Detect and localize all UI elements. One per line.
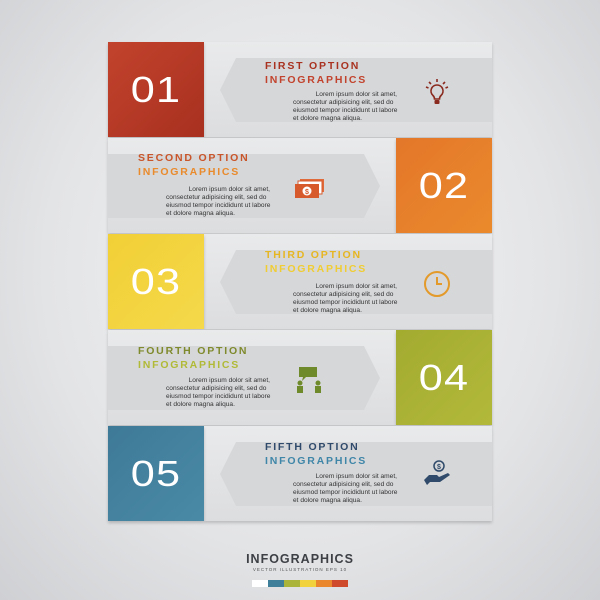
number square 05 [108,426,204,521]
text 3: consectetur adipisicing elit, sed do eiusmod tempor incididunt ut labore et dolore magna aliqua. [293,291,397,314]
text 4: Lorem ipsum dolor sit amet, [189,377,270,384]
title 4: FOURTH OPTION [138,345,248,357]
text 2: Lorem ipsum dolor sit amet, [189,186,270,193]
icon: money [295,179,324,198]
number square 02 [396,138,492,233]
row 3: third option [106,234,494,332]
text 5: Lorem ipsum dolor sit amet, [316,473,397,480]
title 2: INFOGRAPHICS [138,166,240,178]
title 4 [138,345,248,371]
title 3: INFOGRAPHICS [265,263,367,275]
footer title: INFOGRAPHICS [246,552,354,566]
arrow band 1 [220,58,492,122]
number square 04: 04 [419,356,469,398]
row 2: second option [106,138,494,236]
title 3: THIRD OPTION [265,249,362,261]
title 4: INFOGRAPHICS [138,359,240,371]
text 2: consectetur adipisicing elit, sed do eiusmod tempor incididunt ut labore et dolore magna aliqua. [166,194,270,217]
row 4: fourth option [106,330,494,428]
text 5: consectetur adipisicing elit, sed do eiusmod tempor incididunt ut labore et dolore magna aliqua. [293,481,397,504]
arrow band 3 [220,250,492,314]
title 1: FIRST OPTION [265,60,360,72]
icon: light bulb [426,79,448,104]
title 2: SECOND OPTION [138,152,250,164]
title 2 [138,152,250,178]
row 1: first option [106,42,494,140]
color legend bar [252,580,348,587]
text 1: Lorem ipsum dolor sit amet, [316,91,397,98]
number square 02: 02 [419,164,469,206]
icon: money: $ [305,189,309,196]
icon: chat people [297,367,321,393]
title 3 [265,249,367,275]
arrow band 2 [108,154,380,218]
number square 03 [108,234,204,329]
arrow band 4 [108,346,380,410]
title 1 [265,60,367,86]
number square 03: 03 [131,260,181,302]
title 5 [265,441,367,467]
row 5: fifth option [106,426,494,524]
title 5: INFOGRAPHICS [265,455,367,467]
icon: hand with coin: $ [437,464,441,471]
number square 01 [108,42,204,137]
number square 01: 01 [131,68,181,110]
title 1: INFOGRAPHICS [265,74,367,86]
icon: hand with coin [424,460,450,485]
icon: clock [424,271,450,297]
text 1: consectetur adipisicing elit, sed do eiusmod tempor incididunt ut labore et dolore magna aliqua. [293,99,397,122]
text 3: Lorem ipsum dolor sit amet, [316,283,397,290]
text 4: consectetur adipisicing elit, sed do eiusmod tempor incididunt ut labore et dolore magna aliqua. [166,385,270,408]
title 5: FIFTH OPTION [265,441,360,453]
footer title: VECTOR ILLUSTRATION EPS 10 [253,567,347,572]
arrow band 5 [220,442,492,506]
number square 04 [396,330,492,425]
number square 05: 05 [131,452,181,494]
